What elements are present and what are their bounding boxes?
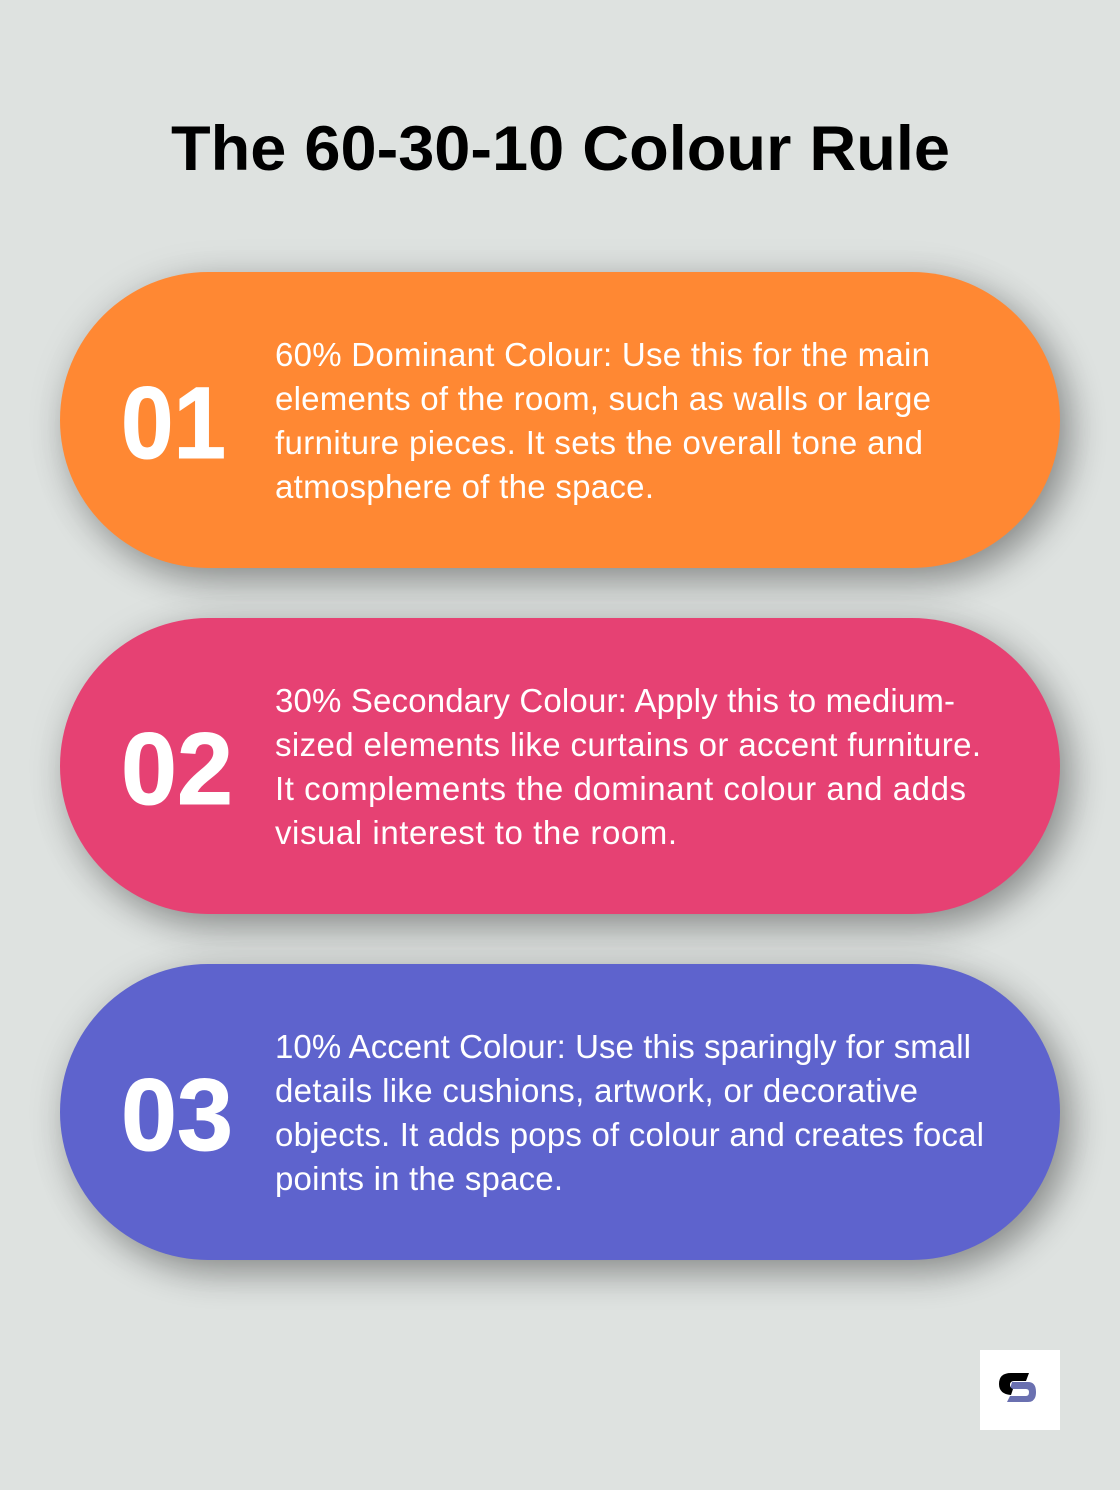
- pill: orange: [60, 272, 1060, 568]
- text block: accent colour: objects. It adds pops of colour and creates focal: [275, 1116, 984, 1153]
- text block: secondary colour: [275, 682, 981, 851]
- text block: dominant colour: furniture pieces. It sets the overall tone and: [275, 424, 923, 461]
- text block: dominant colour: elements of the room, such as walls or large: [275, 380, 931, 417]
- text block: accent colour: 10% Accent Colour: Use this sparingly for small: [275, 1028, 971, 1065]
- text block: secondary colour: It complements the dominant colour and adds: [275, 770, 966, 807]
- text block: accent colour: [275, 1028, 984, 1197]
- number 02: 02: [121, 712, 233, 826]
- number 01: 01: [121, 366, 226, 480]
- panel: 30% secondary colour: [60, 618, 1060, 914]
- text block: dominant colour: atmosphere of the space.: [275, 468, 654, 505]
- text block: secondary colour: 30% Secondary Colour: Apply this to medium-: [275, 682, 955, 719]
- text block: dominant colour: [275, 336, 931, 505]
- text block: dominant colour: 60% Dominant Colour: Use this for the main: [275, 336, 930, 373]
- pill: indigo: [60, 964, 1060, 1260]
- icon: logo upper stroke: [999, 1373, 1029, 1395]
- title: The 60-30-10 Colour Rule: [171, 114, 950, 184]
- pill: pink: [60, 618, 1060, 914]
- text block: secondary colour: visual interest to the room.: [275, 814, 677, 851]
- text block: accent colour: details like cushions, artwork, or decorative: [275, 1072, 918, 1109]
- number 03: 03: [121, 1058, 233, 1172]
- logo badge: [980, 1350, 1060, 1430]
- icon: logo lower stroke: [1007, 1382, 1036, 1402]
- text block: accent colour: points in the space.: [275, 1160, 563, 1197]
- panel: 60% dominant colour: [60, 272, 1060, 568]
- panel: 10% accent colour: [60, 964, 1060, 1260]
- text block: secondary colour: sized elements like curtains or accent furniture.: [275, 726, 981, 763]
